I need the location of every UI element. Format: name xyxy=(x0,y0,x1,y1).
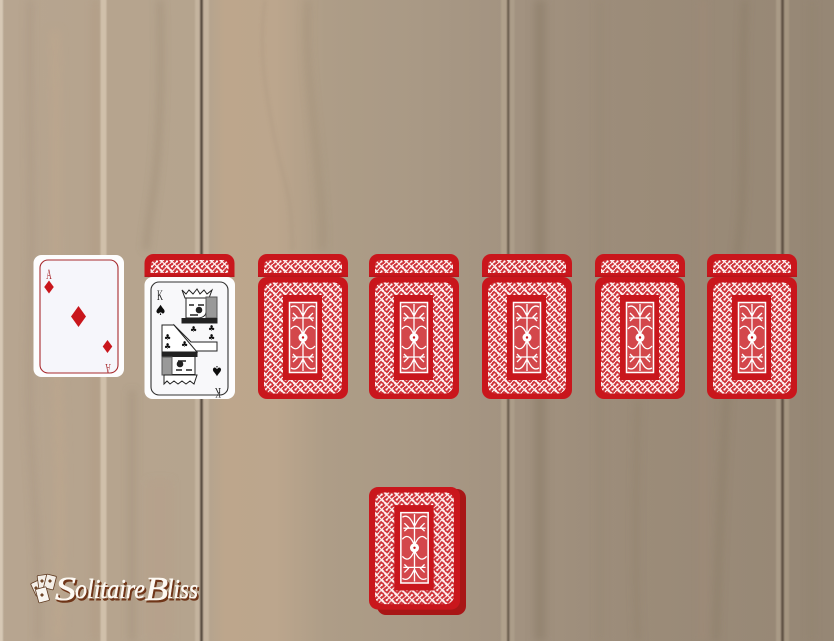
column 1: face-down card peek and king of spades: ♣ xyxy=(208,324,215,333)
wordmark: olitaire xyxy=(75,574,145,604)
column 5: face-down cards xyxy=(595,254,685,399)
column 4: face-down cards xyxy=(482,254,572,399)
column 1: face-down card peek and king of spades xyxy=(144,254,235,402)
wordmark: S xyxy=(55,571,76,608)
icon: fan of cards xyxy=(31,574,57,603)
column 1: face-down card peek and king of spades: ♠ xyxy=(211,362,223,378)
foundation card: ace of diamonds: A xyxy=(46,265,52,283)
wordmark: liss xyxy=(167,574,198,604)
column 1: face-down card peek and king of spades: ♠ xyxy=(154,303,167,319)
column 1: face-down card peek and king of spades: ♣ xyxy=(181,340,188,349)
column 1: face-down card peek and king of spades: ♣ xyxy=(208,333,215,342)
column 1: face-down card peek and king of spades: K xyxy=(157,286,163,304)
column 1: face-down card peek and king of spades: K xyxy=(215,384,221,402)
column 1: face-down card peek and king of spades: ♣ xyxy=(164,333,171,342)
stock pile xyxy=(369,487,466,615)
wordmark: liss xyxy=(168,576,200,606)
column 1: face-down card peek and king of spades: ♣ xyxy=(164,342,171,351)
foundation card: ace of diamonds xyxy=(34,255,124,378)
column 3: face-down cards xyxy=(369,254,459,399)
column 2: face-down cards xyxy=(258,254,348,399)
column 1: face-down card peek and king of spades: ♣ xyxy=(190,325,197,334)
wordmark: B xyxy=(145,571,168,608)
wordmark xyxy=(55,571,200,610)
king figure xyxy=(162,289,217,384)
foundation card: ace of diamonds: A xyxy=(105,360,111,378)
logo: Solitaire Bliss xyxy=(31,571,200,610)
column 6: face-down cards xyxy=(707,254,797,399)
wordmark: S xyxy=(56,573,78,610)
wordmark: olitaire xyxy=(76,576,147,606)
wordmark: B xyxy=(146,573,170,610)
